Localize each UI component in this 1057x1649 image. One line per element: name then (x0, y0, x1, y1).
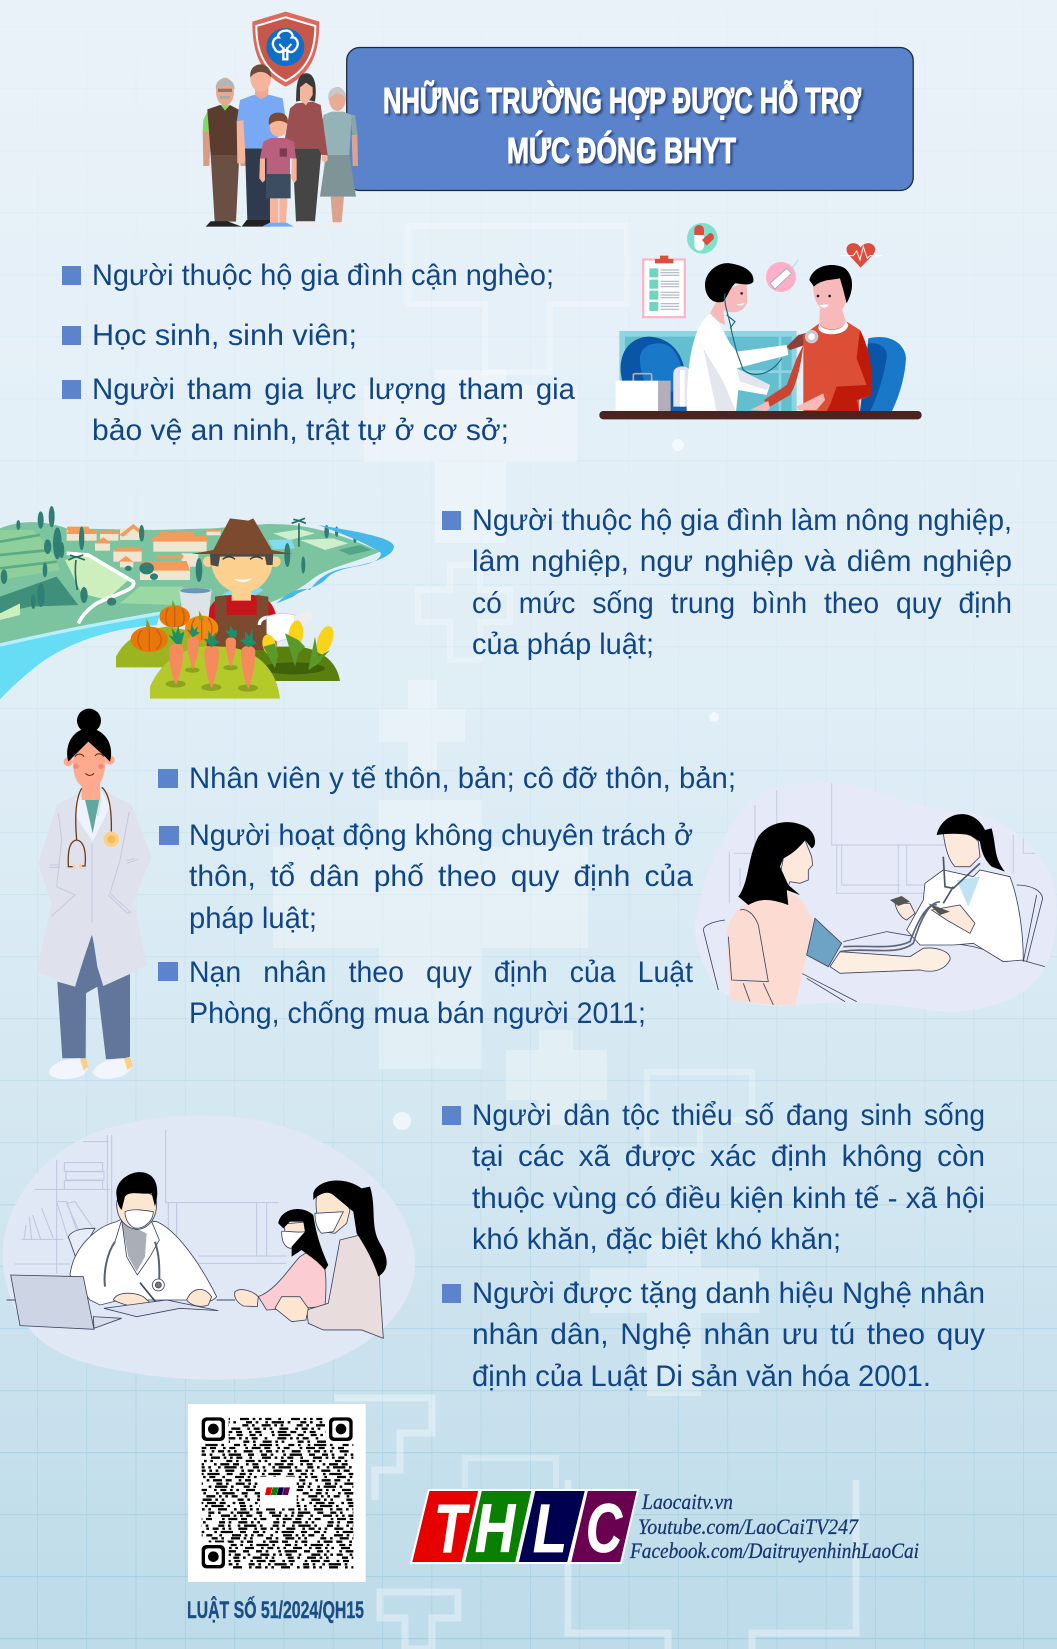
center mound with carrots (150, 624, 280, 699)
medical case and monitor (616, 366, 711, 412)
contact links: Facebook.com/DaitruyenhinhLaoCai (629, 1538, 919, 1563)
THLC logo: L (533, 1490, 567, 1567)
contact links: Laocaitv.vn (641, 1489, 733, 1514)
river (0, 525, 394, 699)
illustration: blood pressure check (695, 782, 1057, 1012)
illustration: female doctor in white coat (37, 709, 152, 1079)
contact links (629, 1489, 919, 1563)
text block: first group of beneficiaries: Người thuộc hộ gia đình cận nghèo; (92, 259, 554, 292)
text block: farming households: Người thuộc hộ gia đình làm nông nghiệp, (472, 504, 1012, 537)
text block: ethnic minorities and artisans: Người dân tộc thiểu số đang sinh sống (472, 1099, 985, 1132)
text block: health workers and victims: Nạn nhân theo quy định của Luật (189, 956, 694, 989)
text block: ethnic minorities and artisans: định của Luật Di sản văn hóa 2001. (472, 1360, 931, 1393)
title text: NHỮNG TRƯỜNG HỢP ĐƯỢC HỖ TRỢ (383, 79, 861, 121)
table (599, 411, 922, 419)
garden mounds (116, 627, 340, 681)
illustration: family with social insurance shield (203, 12, 358, 227)
illustration: masked doctor consulting mother and child (3, 1115, 415, 1380)
child (235, 1209, 328, 1310)
text block: farming households: có mức sống trung bình theo quy định (472, 587, 1012, 620)
text block: health workers and victims: Nhân viên y tế thôn, bản; cô đỡ thôn, bản; (189, 762, 736, 795)
corn and watering can (259, 610, 337, 670)
text block: farming households: của pháp luật; (472, 628, 654, 661)
doctor (11, 1172, 218, 1329)
icon: clipboard (642, 256, 686, 318)
text block: health workers and victims: pháp luật; (189, 902, 317, 935)
grandmother (319, 87, 358, 227)
icon: pills (687, 223, 718, 254)
text block: ethnic minorities and artisans (442, 1099, 985, 1393)
text block: farming households: lâm nghiệp, ngư nghiệp và diêm nghiệp (472, 545, 1012, 578)
text block: ethnic minorities and artisans: tại các xã được xác định không còn (472, 1140, 985, 1173)
icon: shield (252, 12, 319, 87)
patient (750, 265, 872, 411)
farmer (192, 518, 293, 650)
icon: chairs (621, 337, 906, 412)
text block: health workers and victims (158, 762, 736, 1030)
pumpkins (131, 600, 218, 652)
text block: ethnic minorities and artisans: Người được tặng danh hiệu Nghệ nhân (472, 1277, 985, 1310)
illustration: doctor examining patient (599, 223, 922, 419)
text block: ethnic minorities and artisans: thuộc vùng có điều kiện kinh tế - xã hội (472, 1182, 985, 1215)
grandfather (203, 78, 246, 227)
text block: first group of beneficiaries: Học sinh, sinh viên; (92, 319, 357, 352)
THLC logo: T (434, 1490, 470, 1567)
contact links: Youtube.com/LaoCaiTV247 (638, 1514, 859, 1539)
icon: syringe (766, 260, 798, 292)
QR code (188, 1404, 366, 1582)
text block: health workers and victims: Người hoạt động không chuyên trách ở (189, 819, 693, 852)
THLC logo: C (586, 1490, 623, 1567)
father (237, 64, 287, 227)
bucket (179, 588, 212, 620)
mother (275, 1180, 387, 1338)
icon: heart (840, 243, 882, 268)
text block: ethnic minorities and artisans: nhân dân, Nghệ nhân ưu tú theo quy (472, 1318, 985, 1351)
patient (727, 822, 950, 1005)
text block: ethnic minorities and artisans: khó khăn, đặc biệt khó khăn; (472, 1223, 841, 1256)
text block: health workers and victims: Phòng, chống mua bán người 2011; (189, 997, 646, 1030)
text block: health workers and victims: thôn, tổ dân phố theo quy định của (189, 860, 693, 893)
title banner (347, 48, 913, 190)
landscape (0, 522, 380, 645)
THLC logo: H (475, 1490, 517, 1567)
doctor (687, 263, 812, 412)
nurse (890, 814, 1023, 962)
text block: first group of beneficiaries: Người tham gia lực lượng tham gia (92, 373, 575, 406)
text block: farming households (442, 504, 1012, 661)
title text: MỨC ĐÓNG BHYT (507, 129, 736, 171)
mother (285, 73, 328, 227)
title text (383, 79, 861, 171)
text block: first group of beneficiaries: bảo vệ an ninh, trật tự ở cơ sở; (92, 414, 509, 447)
law reference label: LUẬT SỐ 51/2024/QH15 (187, 1596, 364, 1624)
THLC logo (411, 1490, 638, 1567)
text block: first group of beneficiaries (62, 259, 575, 447)
illustration: farmer and landscape (0, 506, 394, 699)
boy (259, 113, 297, 227)
houses and trees (1, 506, 357, 609)
